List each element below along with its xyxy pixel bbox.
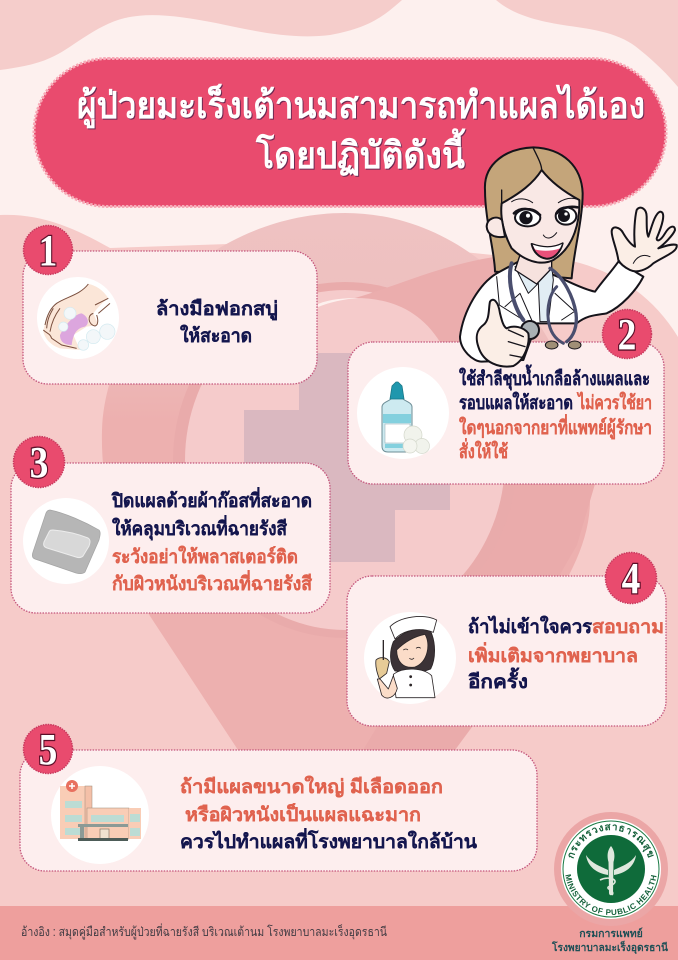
badge: number 3: 3 <box>30 438 48 487</box>
badge: number 5: 5 <box>39 725 57 774</box>
badge: number 2 <box>602 310 652 359</box>
footer reference text: อ้างอิง : สมุดคู่มือสำหรับผู้ป่วยที่ฉายรังสี บริเวณเต้านม โรงพยาบาลมะเร็งอุดรธานี <box>21 923 387 940</box>
panel: step 5 <box>20 724 537 871</box>
footer organisation name: กรมการแพทย์ <box>579 927 643 940</box>
panel: step 3 <box>11 436 330 613</box>
badge: number 2: 2 <box>618 310 636 359</box>
title banner <box>34 58 666 206</box>
step 5 text <box>180 775 477 853</box>
icon: washing hands <box>37 277 119 359</box>
panel: step 4 <box>347 552 666 726</box>
footer organisation name: โรงพยาบาลมะเร็งอุดรธานี <box>551 940 669 955</box>
step 1 text: ล้างมือฟอกสบู่ <box>156 298 278 321</box>
panel: step 2 <box>348 342 664 484</box>
step 2 text: รอบแผลให้สะอาด <box>459 391 573 414</box>
title text: โดยปฏิบัติดังนี้ <box>255 128 466 176</box>
step 2 text: ไม่ควรใช้ยา <box>577 391 652 414</box>
step 4 text: เพิ่มเติมจากพยาบาล <box>468 642 638 667</box>
icon: gauze dressing <box>23 498 109 584</box>
badge: number 1 <box>24 226 72 275</box>
step 1 text <box>156 298 278 347</box>
step 1 text: ให้สะอาด <box>180 324 252 347</box>
step 4 text: ถ้าไม่เข้าใจควร <box>468 615 593 638</box>
icon: saline bottle and cotton <box>357 367 449 459</box>
step 3 text: ระวังอย่าให้พลาสเตอร์ติด <box>112 545 298 568</box>
step 4 text: อีกครั้ง <box>468 667 528 693</box>
badge: number 4: 4 <box>622 554 640 603</box>
step 3 text <box>111 487 312 595</box>
logo: ministry of public health seal <box>554 812 668 926</box>
step 3 text: ปิดแผลด้วยผ้าก๊อสที่สะอาด <box>111 487 312 512</box>
icon: nurse <box>364 612 456 704</box>
logo: ministry of public health seal: กระทรวงสาธารณสุข <box>568 824 654 858</box>
step 2 text <box>459 364 652 463</box>
step 4 text: สอบถาม <box>592 617 664 638</box>
step 3 text: ให้คลุมบริเวณที่ฉายรังสี <box>112 515 287 541</box>
icon: hospital <box>51 766 149 864</box>
title text <box>77 82 645 176</box>
panel: step 1 <box>23 226 317 384</box>
badge: number 4 <box>606 552 656 604</box>
logo: ministry of public health seal: MINISTRY OF PUBLIC HEALTH <box>565 874 656 915</box>
footer organisation name <box>551 927 669 955</box>
badge: number 1: 1 <box>39 226 57 275</box>
step 5 text: ควรไปทำแผลที่โรงพยาบาลใกล้บ้าน <box>180 828 477 853</box>
step 2 text: สั่งให้ใช้ <box>459 438 508 463</box>
step 5 text: ถ้ามีแผลขนาดใหญ่ มีเลือดออก <box>180 775 443 798</box>
illustration: doctor <box>460 147 677 367</box>
step 5 text: หรือผิวหนังเป็นแผลแฉะมาก <box>185 802 421 826</box>
badge: number 3 <box>14 436 64 488</box>
badge: number 5 <box>24 724 72 774</box>
step 3 text: กับผิวหนังบริเวณที่ฉายรังสี <box>112 570 312 595</box>
step 4 text <box>468 615 664 693</box>
